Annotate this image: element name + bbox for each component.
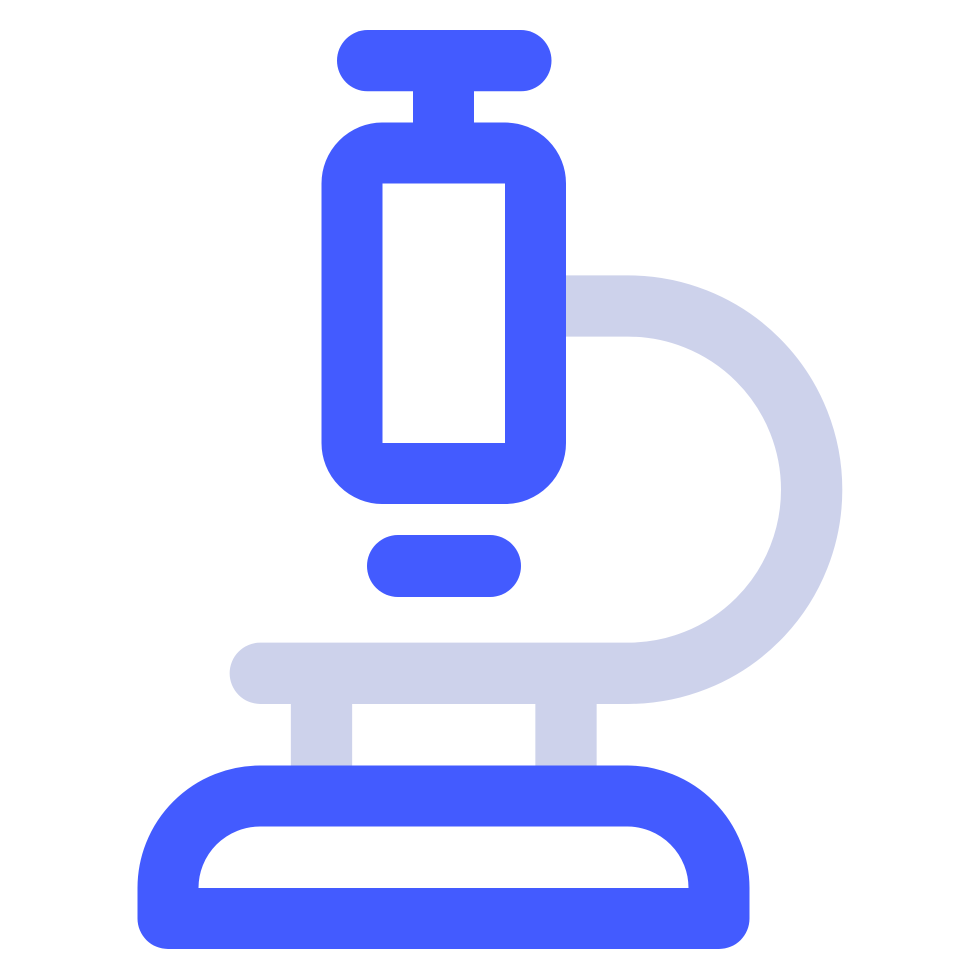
objective lens	[367, 535, 521, 597]
eyepiece tube	[352, 153, 536, 474]
base	[168, 796, 719, 918]
top knob	[337, 30, 552, 135]
arm and stage of microscope	[260, 306, 812, 775]
